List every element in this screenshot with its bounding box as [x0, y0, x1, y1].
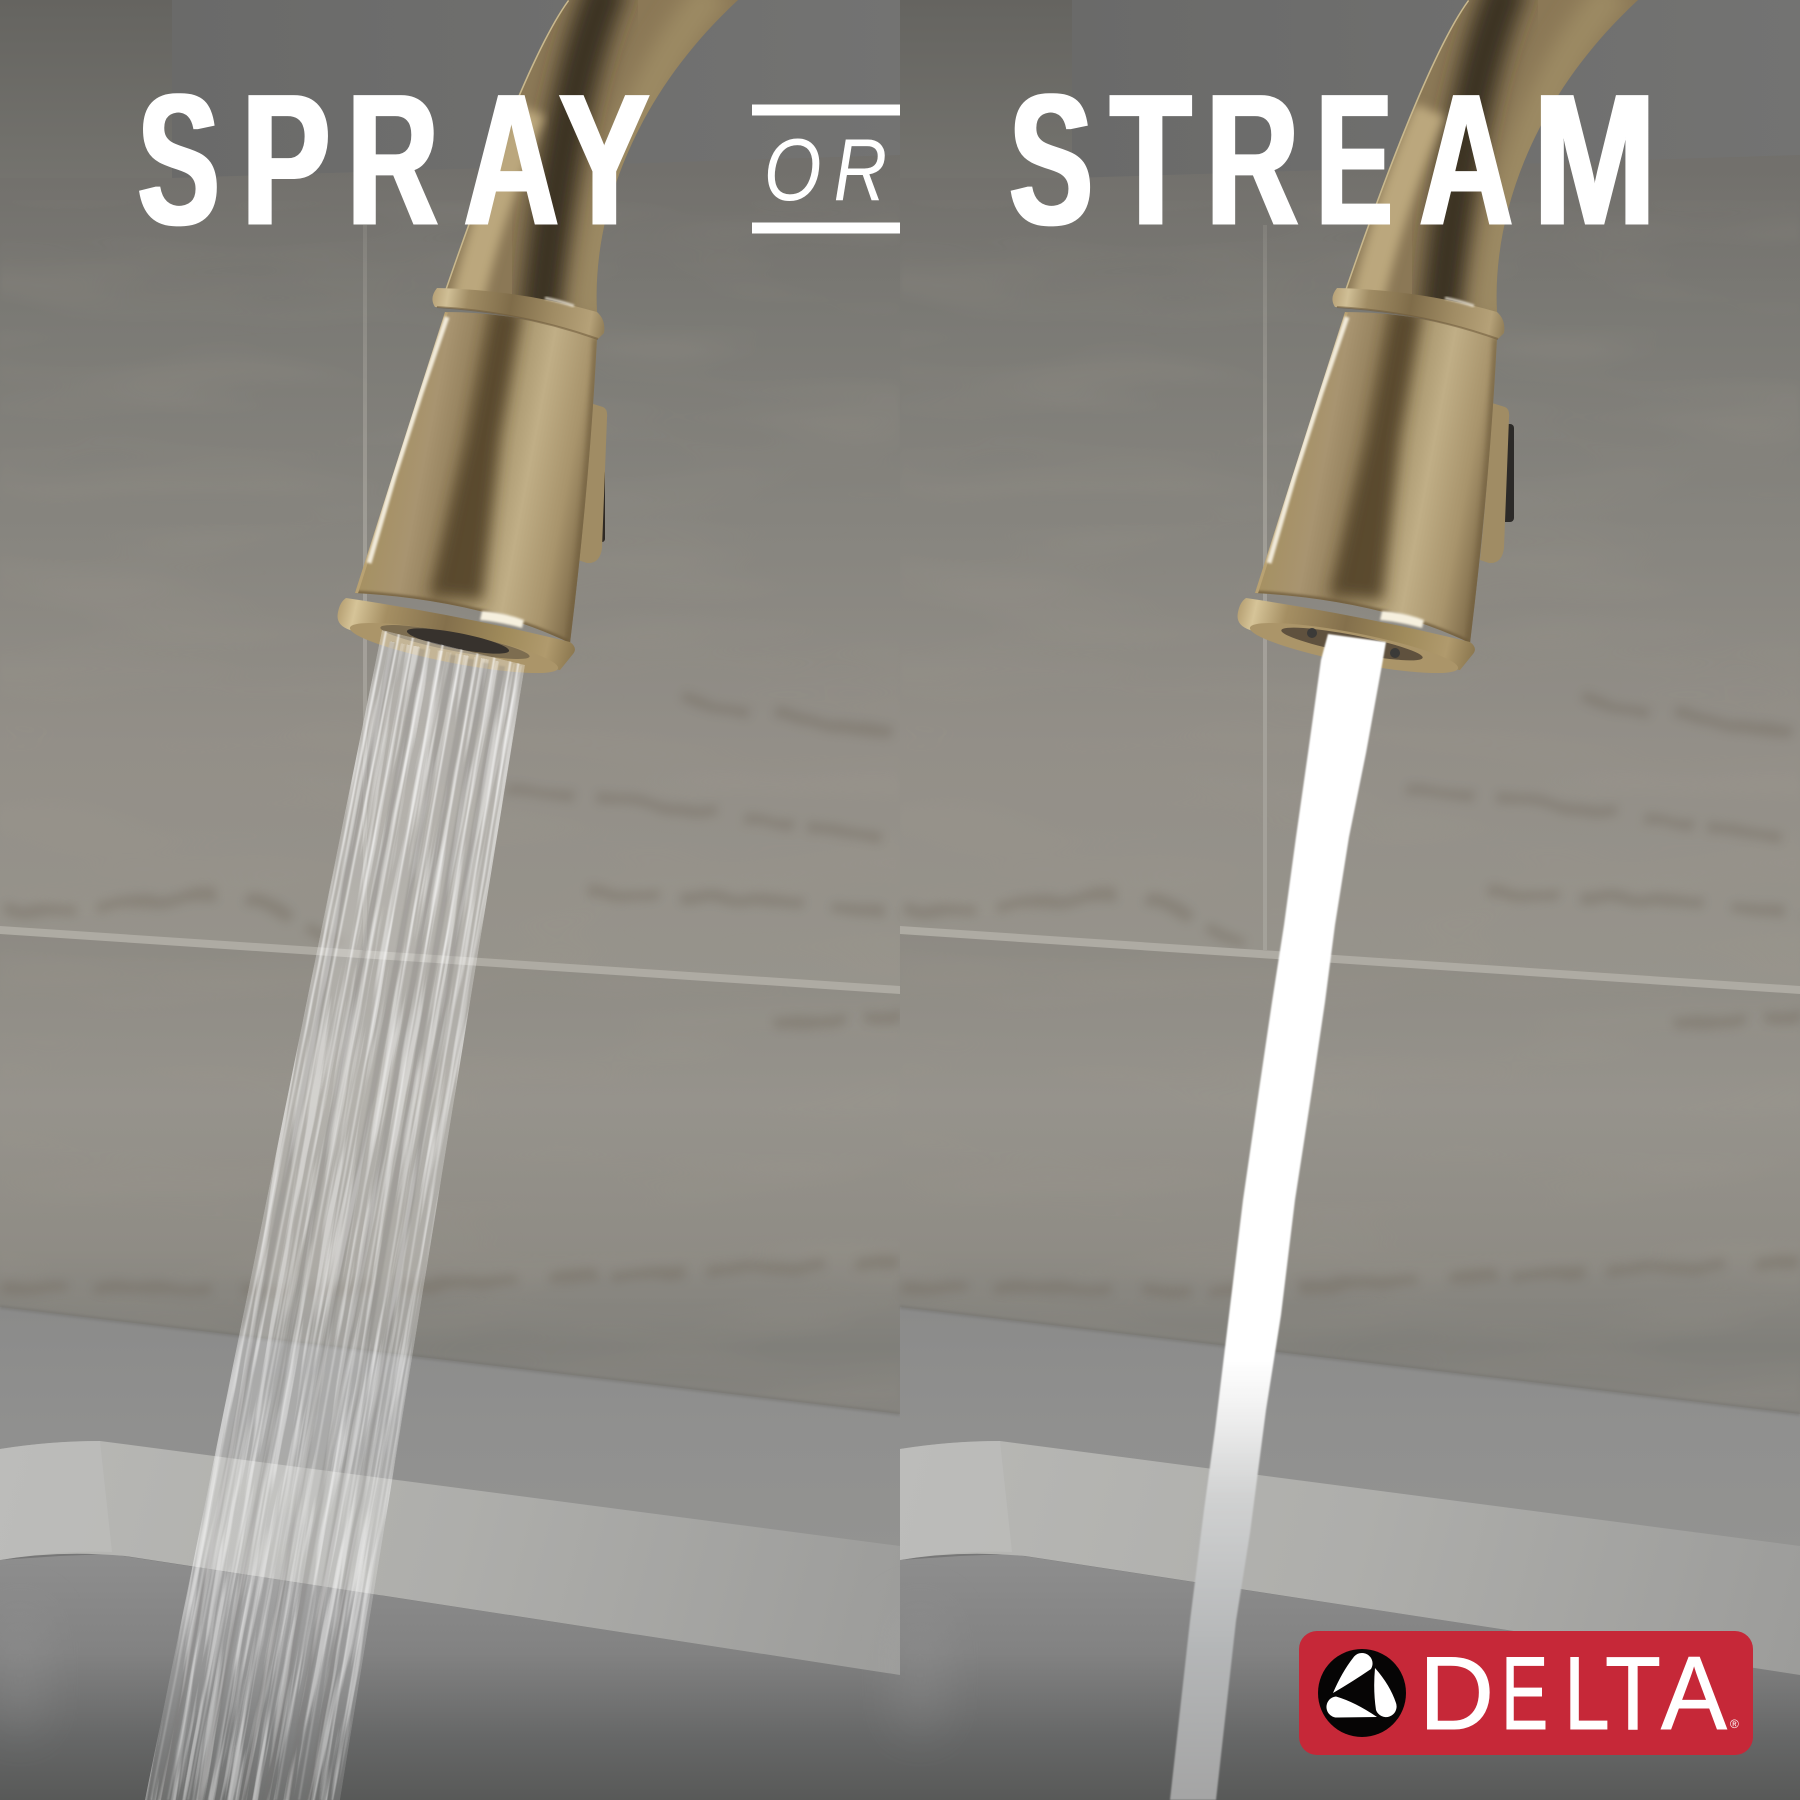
photo background: right panel — [900, 0, 1800, 1800]
heading: SPRAY: S — [138, 54, 220, 265]
registered mark: ® — [1730, 1717, 1739, 1731]
icon: Delta triangle mark — [1318, 1649, 1406, 1737]
heading: STREAM — [1009, 54, 1656, 265]
heading: OR with rules: OR — [764, 121, 887, 219]
heading: STREAM: S — [1009, 54, 1093, 264]
photo background: left panel — [0, 0, 900, 1800]
heading: SPRAY: Y — [558, 54, 650, 264]
heading: STREAM: E — [1316, 54, 1392, 264]
wordmark: DELTA — [1419, 1634, 1727, 1752]
heading: STREAM: M — [1533, 54, 1656, 265]
heading: OR with rules — [752, 104, 900, 234]
heading: STREAM: T — [1110, 54, 1192, 265]
wordmark: DELTA: A — [1661, 1636, 1727, 1752]
wordmark: DELTA: D — [1419, 1636, 1494, 1752]
heading: SPRAY — [138, 54, 650, 265]
Delta logo badge — [1299, 1631, 1753, 1755]
faucet: left panel — [338, 0, 738, 683]
wordmark: DELTA: T — [1605, 1635, 1661, 1751]
heading: STREAM: R — [1206, 55, 1299, 265]
faucet: right panel — [1238, 0, 1638, 683]
heading: SPRAY: P — [242, 54, 331, 265]
wordmark: DELTA: E — [1501, 1634, 1548, 1751]
heading: SPRAY: A — [464, 56, 559, 265]
water spray — [145, 630, 547, 1800]
water stream — [1170, 634, 1386, 1800]
wordmark: DELTA: L — [1564, 1635, 1610, 1751]
heading: STREAM: A — [1419, 55, 1513, 265]
heading: SPRAY: R — [347, 55, 439, 264]
